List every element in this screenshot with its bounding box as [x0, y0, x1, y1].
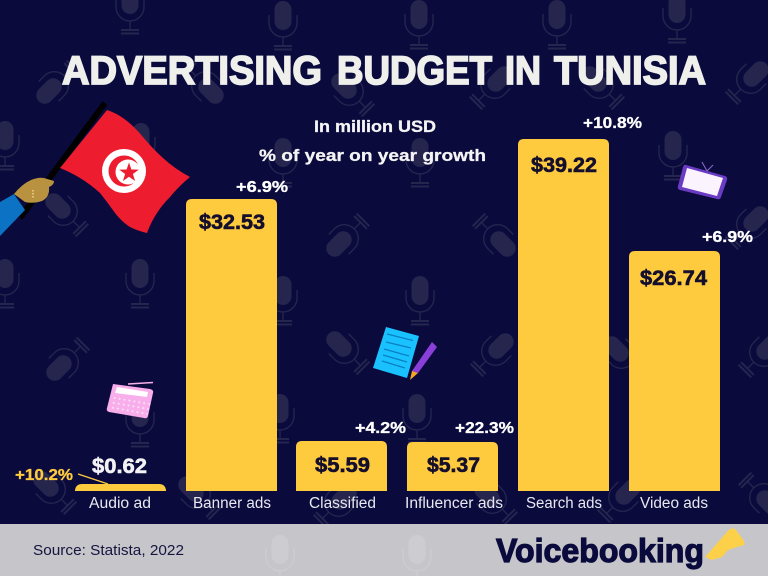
- category labels: Audio ad: [89, 495, 151, 512]
- values: [92, 154, 707, 478]
- bar: Classified: [296, 441, 387, 491]
- category labels: Influencer ads: [405, 495, 503, 512]
- growth labels: +10.8%: [583, 115, 642, 132]
- icon: hand holding Tunisian flag: [0, 103, 190, 236]
- title: BUDGET: [337, 49, 492, 93]
- bar: Influencer ads: [407, 442, 498, 491]
- icon: notes and pencil: [373, 327, 437, 380]
- icon: radio: [107, 382, 153, 418]
- icon: megaphone: [705, 528, 744, 560]
- title: [62, 49, 706, 93]
- values: $0.62: [92, 455, 147, 478]
- growth labels: [15, 115, 753, 484]
- bar: Banner ads: [186, 199, 277, 491]
- logo wordmark: Voicebooking: [496, 532, 704, 569]
- growth labels: +22.3%: [455, 420, 514, 437]
- values: $39.22: [531, 154, 597, 177]
- title: ADVERTISING: [62, 49, 322, 93]
- bar: Search ads: [518, 139, 609, 491]
- category labels: Classified: [309, 495, 376, 512]
- bar: Video ads: [629, 251, 720, 491]
- footer: [0, 524, 768, 576]
- title: IN: [505, 49, 541, 93]
- growth labels: +10.2%: [15, 467, 73, 484]
- growth labels: +4.2%: [355, 420, 406, 437]
- title: TUNISIA: [554, 49, 706, 93]
- icon: television: [678, 162, 727, 199]
- bar: Audio ad: [75, 484, 166, 491]
- values: $26.74: [640, 267, 707, 290]
- values: $5.37: [427, 454, 480, 477]
- source: Source: Statista, 2022: [33, 543, 184, 559]
- category labels: Video ads: [640, 495, 708, 512]
- subtitle: In million USD: [314, 117, 436, 136]
- category labels: [89, 495, 708, 512]
- leader line: [78, 474, 108, 484]
- values: $5.59: [315, 454, 370, 477]
- subtitle: [259, 117, 486, 165]
- growth labels: +6.9%: [702, 229, 753, 246]
- growth labels: +6.9%: [236, 179, 288, 196]
- category labels: Banner ads: [193, 495, 271, 512]
- category labels: Search ads: [526, 495, 602, 512]
- subtitle: % of year on year growth: [259, 146, 486, 165]
- values: $32.53: [199, 211, 265, 234]
- bar chart: [15, 115, 753, 512]
